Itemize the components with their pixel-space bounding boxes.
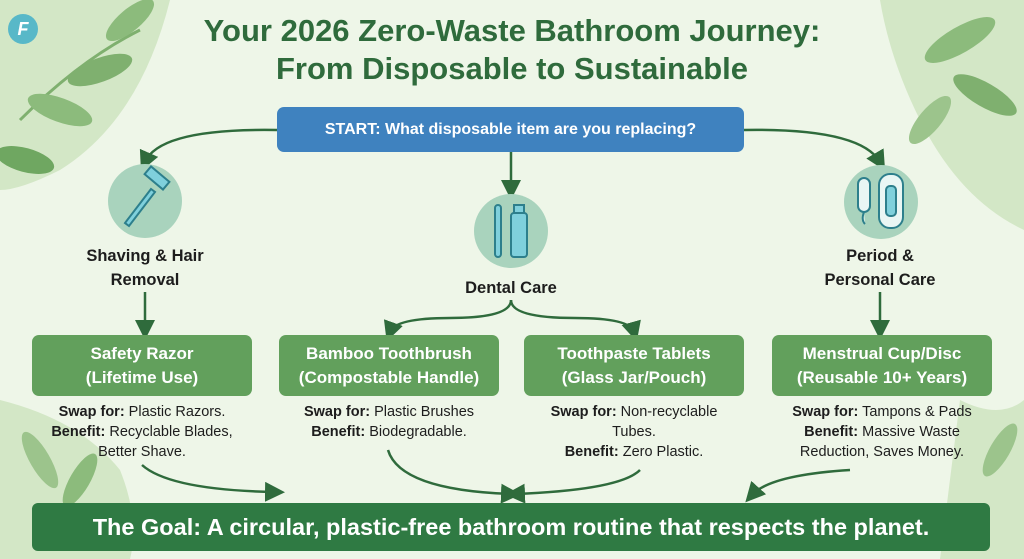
text: razor desc: Benefit: Recyclable Blades,: [51, 424, 233, 440]
box: menstrual: [772, 335, 992, 396]
text: bamboo desc: Swap for: Plastic Brushes: [304, 404, 474, 420]
box: menstrual: Menstrual Cup/Disc: [803, 344, 961, 363]
text: razor desc: Swap for: Plastic Razors.: [59, 404, 225, 420]
goal bar: [32, 503, 990, 551]
goal bar: The Goal: A circular, plastic-free bathroom routine that respects the planet.: [93, 514, 929, 540]
title: Your 2026 Zero-Waste Bathroom Journey:: [204, 13, 820, 48]
text: bamboo desc: [304, 404, 474, 440]
logo: [8, 14, 38, 44]
text: toothpaste desc: Swap for: Non-recyclable: [551, 404, 717, 420]
text: bamboo desc: Benefit: Biodegradable.: [311, 424, 467, 440]
text: menstrual desc: Swap for: Tampons & Pads: [792, 404, 972, 420]
text: menstrual desc: [792, 404, 972, 460]
text: razor desc: [51, 404, 233, 460]
text: toothpaste desc: [551, 404, 717, 460]
start box: [277, 107, 744, 152]
box: toothpaste: (Glass Jar/Pouch): [562, 368, 706, 387]
icon: razor: [108, 164, 182, 238]
start box: START: What disposable item are you replacing?: [325, 121, 696, 138]
icon: dental: [474, 194, 548, 268]
text: razor desc: Better Shave.: [98, 444, 186, 460]
box: safety razor: (Lifetime Use): [86, 368, 198, 387]
text: toothpaste desc: Tubes.: [612, 424, 656, 440]
title: [204, 13, 820, 86]
label: period: [824, 247, 935, 289]
icon: period: [844, 165, 918, 239]
box: bamboo: (Compostable Handle): [299, 368, 479, 387]
label: shaving: Shaving & Hair: [86, 247, 204, 265]
label: shaving: Removal: [111, 271, 179, 289]
box: menstrual: (Reusable 10+ Years): [797, 368, 967, 387]
box: bamboo: Bamboo Toothbrush: [306, 344, 472, 363]
label: period: Period &: [846, 247, 914, 265]
box: toothpaste: [524, 335, 744, 396]
box: bamboo: [279, 335, 499, 396]
box: safety razor: [32, 335, 252, 396]
text: menstrual desc: Reduction, Saves Money.: [800, 444, 964, 460]
label: shaving: [86, 247, 204, 289]
box: safety razor: Safety Razor: [90, 344, 193, 363]
title: From Disposable to Sustainable: [276, 51, 748, 86]
text: toothpaste desc: Benefit: Zero Plastic.: [565, 444, 703, 460]
label: dental: Dental Care: [465, 279, 557, 297]
box: toothpaste: Toothpaste Tablets: [557, 344, 711, 363]
text: menstrual desc: Benefit: Massive Waste: [804, 424, 960, 440]
logo: F: [18, 19, 28, 39]
label: period: Personal Care: [824, 271, 935, 289]
